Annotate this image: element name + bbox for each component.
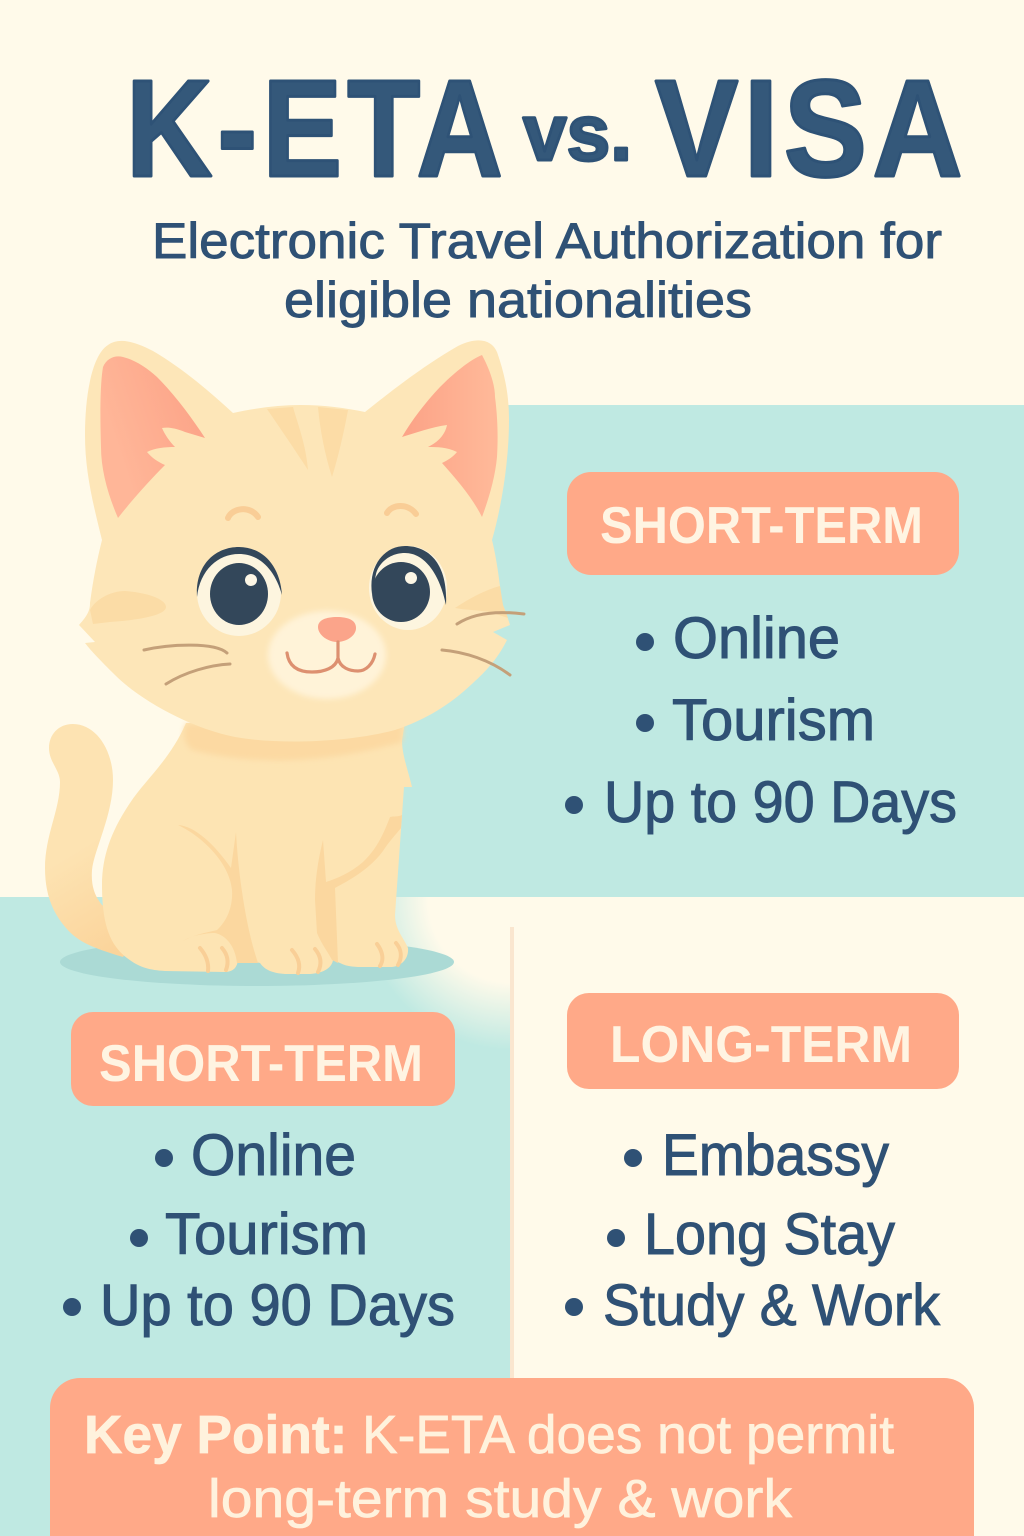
- forehead stripes: [267, 407, 348, 477]
- title: K-ETA: [126, 52, 508, 206]
- cat head: [79, 340, 510, 741]
- panel: long-term: [565, 993, 959, 1338]
- callout: key point: long-term study & work: [208, 1469, 793, 1529]
- vertical divider: [510, 927, 514, 1378]
- hind leg shading: [178, 825, 258, 963]
- list: long-term features: Embassy: [662, 1123, 889, 1188]
- illustration: kitten: [45, 340, 524, 986]
- soft cream glow on teal corner: [340, 897, 511, 1077]
- left eye: [197, 547, 282, 636]
- title: VISA: [655, 52, 968, 206]
- right eye: [369, 546, 447, 630]
- list: short-term features: Tourism: [672, 688, 875, 753]
- badge: short-term: SHORT-TERM: [600, 497, 923, 555]
- badge: short-term: SHORT-TERM: [99, 1035, 423, 1093]
- panel background: bottom-left teal: [0, 897, 511, 1536]
- left ear inner: [100, 356, 205, 518]
- panel: top short-term (K-ETA): [565, 472, 959, 835]
- right ear inner: [402, 355, 498, 517]
- list: short-term features: Online: [673, 606, 840, 671]
- subtitle: [152, 213, 942, 328]
- list: short-term features: Up to 90 Days: [100, 1273, 455, 1338]
- cheek patches: [90, 586, 508, 624]
- cat shadow: [60, 938, 454, 986]
- panel: bottom-left short-term: [63, 1012, 455, 1338]
- list: long-term features: Long Stay: [644, 1202, 895, 1267]
- muzzle: [268, 611, 386, 699]
- badge: short-term: [71, 1012, 455, 1106]
- nose: [318, 617, 356, 642]
- callout: key point: Key Point: K-ETA does not permit: [84, 1405, 894, 1465]
- title: [126, 52, 968, 206]
- badge: long-term: [567, 993, 959, 1089]
- front leg shading: [315, 815, 402, 963]
- whiskers: [144, 613, 524, 684]
- list: short-term features: Online: [191, 1123, 356, 1188]
- list: short-term features: [63, 1123, 455, 1338]
- subtitle: eligible nationalities: [284, 272, 752, 328]
- badge: short-term: [567, 472, 959, 575]
- eyebrows: [228, 506, 416, 518]
- chest shading: [184, 722, 403, 760]
- panel background: K-ETA top teal: [395, 405, 1024, 897]
- cat tail: [45, 724, 140, 957]
- list: long-term features: [565, 1123, 941, 1338]
- list: long-term features: Study & Work: [603, 1273, 941, 1338]
- list: short-term features: Tourism: [165, 1202, 368, 1267]
- list: short-term features: Up to 90 Days: [604, 770, 957, 835]
- list: short-term features: [565, 606, 957, 835]
- subtitle: Electronic Travel Authorization for: [152, 213, 942, 269]
- badge: long-term: LONG-TERM: [610, 1016, 912, 1074]
- title: vs.: [523, 88, 632, 177]
- paws and toes: [200, 943, 401, 973]
- mouth: [287, 642, 375, 672]
- cat body: [102, 722, 412, 974]
- callout: key point: [50, 1378, 974, 1536]
